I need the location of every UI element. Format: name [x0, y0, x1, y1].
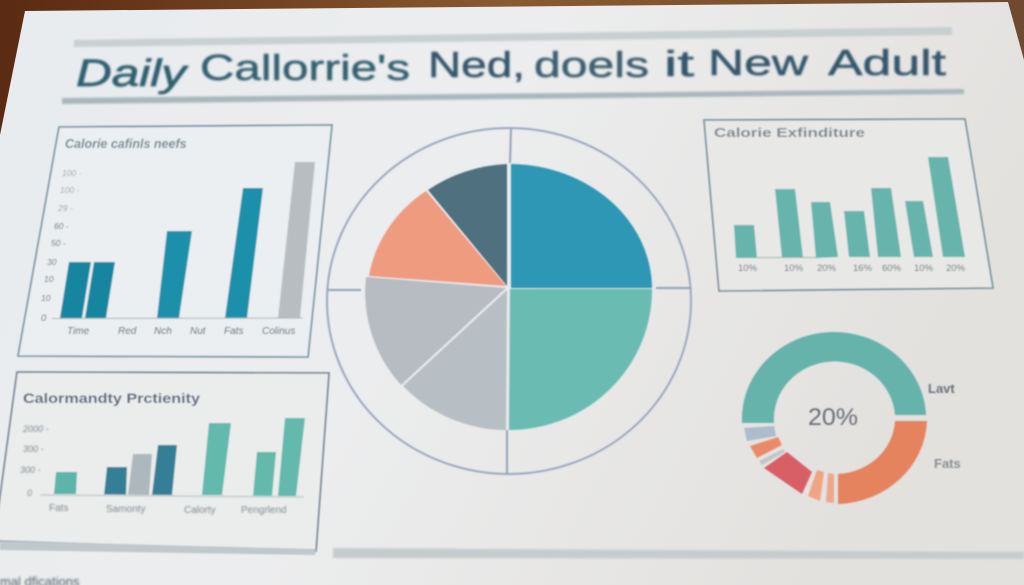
x axis labels: Fats — [49, 503, 68, 514]
panel: calorie expenditure bar chart — [704, 119, 993, 291]
segment: orange — [838, 421, 927, 504]
slice: dark slate — [428, 164, 507, 286]
segment: pale — [826, 473, 834, 503]
slice: grey lower — [403, 290, 507, 430]
y axis labels: 100 - — [60, 185, 80, 195]
central pie chart — [327, 128, 691, 474]
centre value: 20% — [808, 404, 858, 431]
title block: Adult — [828, 42, 946, 83]
panel heading: Calorie Exfinditure — [714, 126, 865, 140]
y axis labels — [41, 168, 82, 324]
y axis labels: 300 - — [20, 465, 41, 475]
segment: grey small — [759, 449, 785, 465]
footer rule — [333, 548, 1024, 559]
y axis labels: 10 — [44, 274, 54, 284]
panel: calorie needs bar chart — [18, 125, 332, 357]
title block: New — [708, 42, 809, 83]
x axis labels: Nut — [190, 326, 207, 337]
title block: doels — [534, 44, 649, 85]
x axis labels: Colinus — [262, 326, 295, 337]
title block — [62, 27, 964, 104]
x axis labels: Fats — [224, 326, 243, 337]
bars — [54, 472, 77, 494]
y axis labels: 0 — [41, 313, 47, 324]
x axis labels: 20% — [946, 263, 966, 274]
x axis labels: 20% — [817, 263, 837, 274]
label: Lavt: Lavt — [928, 381, 955, 396]
segment: teal — [742, 332, 926, 423]
x axis labels: Red — [118, 326, 137, 337]
y axis labels: 30 — [47, 257, 57, 267]
y axis labels — [20, 424, 49, 498]
x axis labels: Pengrlend — [241, 505, 287, 516]
donut chart — [742, 332, 961, 504]
y axis labels: 300 - — [23, 444, 44, 454]
x axis labels: 10% — [784, 263, 804, 274]
title block: Ned, — [428, 44, 525, 85]
bars — [734, 225, 757, 258]
x axis labels: 10% — [738, 263, 758, 274]
outer ring — [327, 128, 691, 474]
x axis labels: 60% — [882, 263, 902, 274]
y axis labels: 50 - — [51, 238, 66, 248]
slice: orange — [369, 191, 506, 286]
bars — [60, 262, 91, 318]
label: Fats: Fats — [934, 456, 961, 471]
x axis labels: Time — [67, 326, 90, 337]
y axis labels: 0 — [27, 488, 32, 498]
title: Daily — [76, 53, 189, 95]
title block: it — [664, 43, 694, 84]
title block: Callorrie's — [200, 47, 410, 88]
y axis labels: 29 - — [57, 203, 73, 213]
x axis labels: 16% — [853, 263, 873, 274]
slice: blue — [511, 164, 652, 288]
x axis labels: Nch — [154, 326, 172, 337]
slice: grey left — [365, 277, 506, 385]
x axis labels: Calorty — [184, 505, 216, 516]
y axis labels: 10 — [41, 293, 51, 303]
slice: teal — [509, 289, 652, 430]
segment: grey — [744, 426, 776, 441]
x axis labels: 10% — [914, 263, 934, 274]
panel heading: Calorie cafinls neefs — [65, 137, 187, 151]
segment: small orange — [750, 437, 782, 458]
panel heading: Calormandty Prctienity — [23, 390, 200, 406]
y axis labels: 2000 - — [22, 424, 49, 434]
x axis labels — [49, 503, 287, 516]
segment: light orange — [808, 470, 824, 501]
x axis labels — [738, 263, 966, 274]
y axis labels: 100 - — [62, 168, 82, 178]
y axis labels: 60 - — [54, 221, 69, 231]
x axis labels — [67, 326, 295, 337]
panel: proficiency bar chart — [0, 372, 329, 555]
segment: red — [764, 452, 812, 494]
x axis labels: Samonty — [106, 504, 145, 515]
